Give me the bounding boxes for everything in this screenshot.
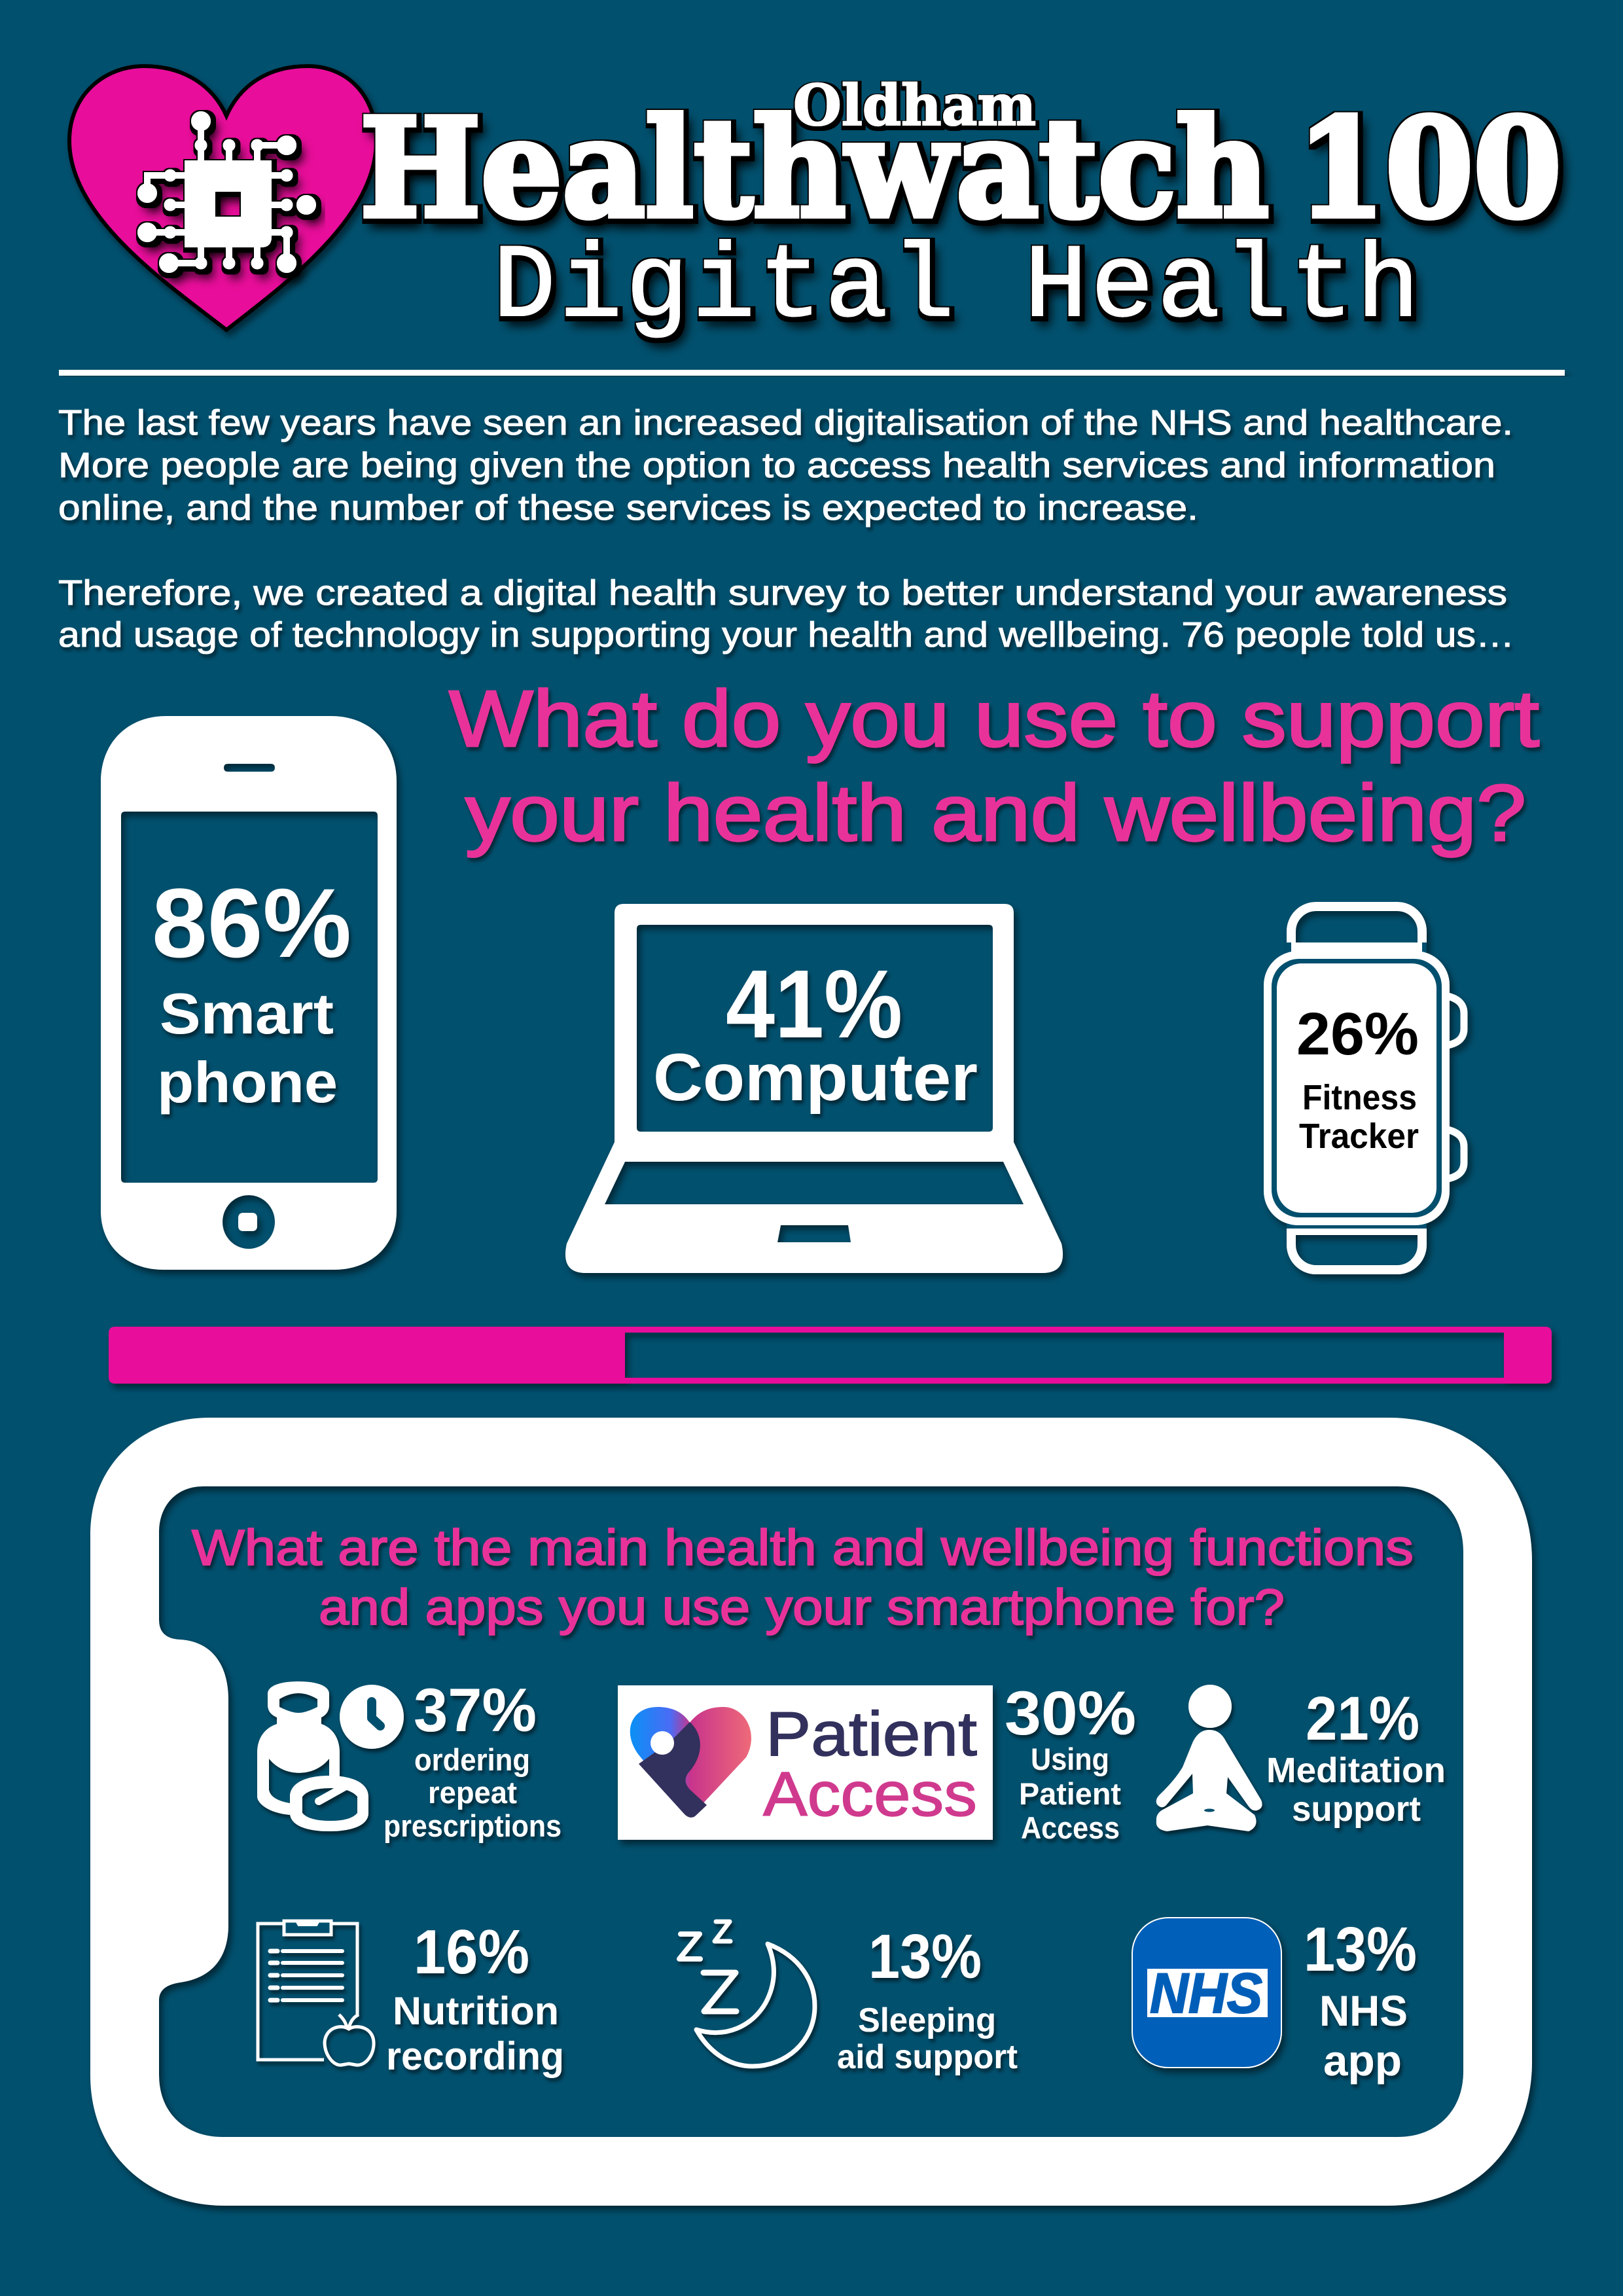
text: 13% sleeping aid support: 13% [868,1922,982,1992]
text: 37% ordering repeat prescriptions: ordering [414,1742,530,1777]
stat: 86% smart phone: 86% [152,868,351,978]
text: 13% NHS app: app [1323,2036,1402,2085]
stat: 26% fitness tracker: Fitness [1302,1078,1417,1117]
stat: sleeping aid support 13% [679,1922,1018,2076]
text: 30% using Patient Access [1005,1679,1136,1845]
text: 16% nutrition recording [386,1917,564,2078]
text: 16% nutrition recording: 16% [414,1917,529,1987]
text: 16% nutrition recording: Nutrition [393,1989,559,2033]
progress bar [109,1327,1552,1384]
intro text block: Therefore, we created a digital health survey to better understand your awareness [58,573,1507,613]
text: 30% using Patient Access: Using [1031,1742,1109,1776]
text: 16% nutrition recording: recording [386,2034,564,2078]
intro text block: The last few years have seen an increased digitalisation of the NHS and healthcare. [58,403,1513,442]
text: 21% meditation support: Meditation [1266,1751,1446,1790]
text: 37% ordering repeat prescriptions: 37% [414,1676,537,1744]
text: 37% ordering repeat prescriptions [383,1676,562,1843]
text: 37% ordering repeat prescriptions: prescriptions [383,1808,562,1843]
text: 21% meditation support: 21% [1306,1684,1419,1753]
heading: What do you use [449,674,1539,857]
icon: moon and zzz [679,1922,815,2066]
text: 30% using Patient Access: Access [1021,1810,1120,1845]
text: 13% sleeping aid support: aid support [837,2038,1018,2076]
fitness tracker panel: 26% [1264,906,1464,1270]
stat: 86% smart phone: Smart [160,981,334,1046]
heading: main functions and apps: and apps you use your smartphone for? [319,1579,1285,1636]
heading: main functions and apps: What are the main health and wellbeing functions [192,1520,1414,1576]
stat: 41% computer: Computer [653,1040,978,1115]
text: 21% meditation support [1266,1684,1446,1829]
smartphone panel: 86% [101,716,397,1270]
text: 13% NHS app [1304,1914,1417,2085]
stat: 26% fitness tracker [1296,1001,1419,1156]
text: 13% NHS app: 13% [1304,1914,1417,1984]
logo: Patient Access: Patient [766,1699,977,1769]
panel: smartphone frame [90,1418,1532,2206]
logo: Patient Access: Access [763,1759,977,1829]
title: Healthwatch 100: 100 [1297,89,1561,249]
text: 37% ordering repeat prescriptions: repeat [428,1775,517,1810]
text: 21% meditation support: support [1292,1789,1421,1829]
logo: Patient Access [618,1685,993,1840]
text: 30% using Patient Access: 30% [1005,1679,1136,1748]
icon: meditating figure [1156,1685,1262,1831]
icon: NHS app [1132,1918,1281,2068]
stat: 41% computer: 41% [726,950,902,1058]
icon: pill bottle and clock [257,1681,404,1831]
stat: NHS app 13% [1132,1914,1417,2085]
icon: NHS app: NHS [1150,1962,1262,2025]
stat: nutrition recording 16% [258,1917,564,2078]
stat: meditation support 21% [1156,1684,1446,1831]
icon: clipboard and apple [258,1921,374,2065]
intro text block: and usage of technology in supporting your health and wellbeing. 76 people told us… [58,615,1514,655]
intro text block: More people are being given the option to access health services and information [58,446,1495,485]
icon: smartphone [101,716,397,1270]
title: Healthwatch 100: Healthwatch [360,89,1269,249]
icon: laptop [565,904,1063,1273]
stat: 86% smart phone: phone [157,1050,338,1115]
heading: main functions and apps [192,1520,1414,1636]
heading: What do you use: your health and wellbeing? [465,768,1526,857]
stat: repeat prescriptions 37% [257,1676,562,1843]
stat: 26% fitness tracker: Tracker [1299,1117,1419,1156]
stat: Patient Access 30% [618,1679,1136,1845]
text: 13% sleeping aid support: Sleeping [858,2001,996,2039]
text: 13% sleeping aid support [837,1922,1018,2076]
text: 30% using Patient Access: Patient [1019,1776,1121,1811]
intro text block: online, and the number of these services is expected to increase. [58,488,1198,528]
stat: 26% fitness tracker: 26% [1296,1001,1419,1067]
stat: 41% computer [653,950,978,1115]
text: 13% NHS app: NHS [1319,1986,1408,2035]
icon: pink heart with circuit chip [69,66,376,330]
computer panel: 41% [565,904,1063,1273]
heading: What do you use: What do you use to support [449,674,1539,763]
title: Oldham: Oldham [793,73,1036,139]
intro text block [58,403,1514,655]
divider line [59,370,1565,376]
subtitle: Digital Health: Digital Health [493,229,1419,348]
icon: smartwatch [1264,906,1464,1270]
stat: 86% smart phone [152,868,351,1115]
